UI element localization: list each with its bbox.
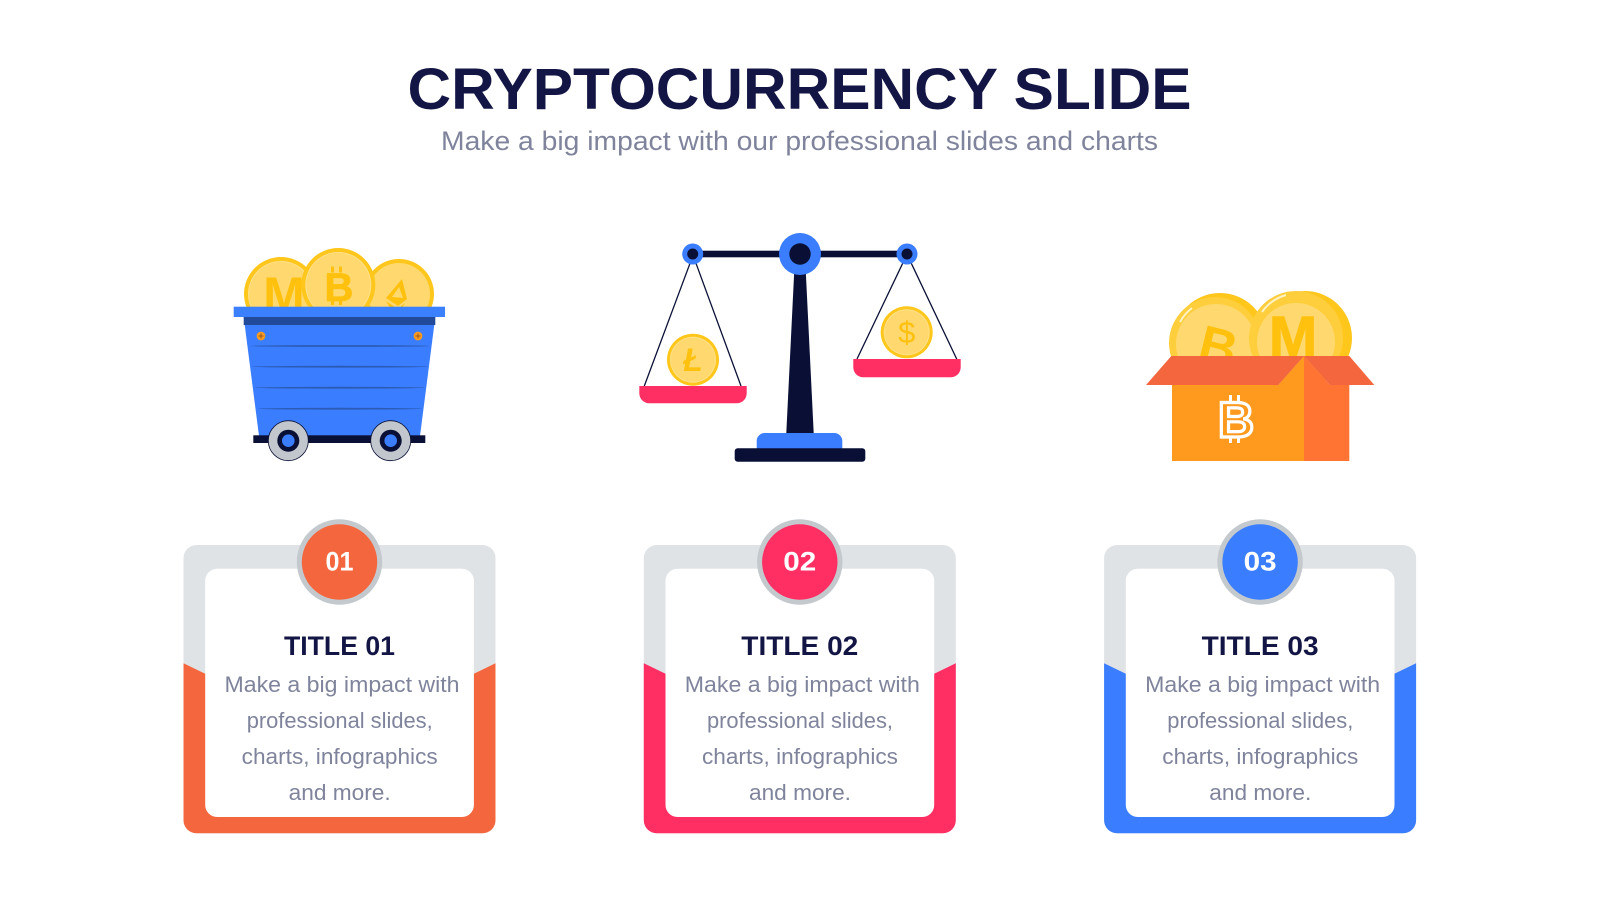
card title: TITLE 01 xyxy=(284,631,395,661)
box left flap xyxy=(1146,356,1304,385)
card inner xyxy=(1126,569,1394,817)
card text: and more. xyxy=(1209,780,1311,805)
scale strings xyxy=(644,263,957,386)
icon: balance scale xyxy=(639,233,961,462)
icon: bitcoin coin: B xyxy=(325,266,353,310)
card accent xyxy=(1104,663,1416,833)
title: CRYPTOCURRENCY SLIDE xyxy=(408,57,1192,122)
cart plank lines xyxy=(250,345,430,410)
scale beam xyxy=(693,251,907,257)
icon: monero coin xyxy=(244,257,318,331)
cart body xyxy=(244,317,435,436)
card frame xyxy=(1104,545,1416,833)
card inner xyxy=(666,569,934,817)
card text: and more. xyxy=(749,780,851,805)
icon: bitcoin coin in box: B xyxy=(1193,315,1243,380)
card frame xyxy=(184,545,496,833)
box side xyxy=(1304,356,1349,461)
scale left pan xyxy=(639,386,747,403)
card text: professional slides, xyxy=(707,708,893,733)
number badge: 03 xyxy=(1244,546,1277,576)
card text: professional slides, xyxy=(247,708,433,733)
icon: mining cart with coins xyxy=(234,248,445,461)
number badge xyxy=(1217,519,1303,605)
card accent xyxy=(644,663,956,833)
card title: TITLE 03 xyxy=(1202,631,1319,661)
card title: TITLE 02 xyxy=(741,631,858,661)
icon: bitcoin coin xyxy=(301,248,375,322)
icon: dollar coin xyxy=(881,306,933,358)
number badge: 01 xyxy=(326,546,354,576)
icon: monero coin in box: M xyxy=(1269,305,1317,370)
card text: Make a big impact with xyxy=(224,672,460,697)
cart rivets xyxy=(257,332,422,340)
card text: professional slides, xyxy=(1167,708,1353,733)
card text: charts, infographics xyxy=(702,744,898,769)
icon: bitcoin coin in box xyxy=(1169,293,1267,389)
card text: Make a big impact with xyxy=(1145,672,1380,697)
box right flap xyxy=(1304,356,1374,385)
card inner xyxy=(205,569,474,817)
scale pivot xyxy=(779,233,821,275)
icon: litecoin coin: Ł xyxy=(682,342,703,378)
icon: bitcoin symbol on box: B xyxy=(1218,392,1254,448)
cart rim xyxy=(234,307,445,317)
cart axle xyxy=(253,435,425,443)
number badge xyxy=(297,519,382,605)
scale base lower xyxy=(735,448,865,462)
cart wheel left xyxy=(268,421,308,461)
card frame xyxy=(644,545,956,833)
icon: monero coin: M xyxy=(263,267,305,323)
panel: card 02 xyxy=(644,519,956,833)
scale left joint xyxy=(682,244,703,264)
card text: and more. xyxy=(289,780,391,805)
panel: card 01 xyxy=(184,519,496,833)
card text xyxy=(1145,672,1380,805)
card text xyxy=(685,672,920,805)
icon: ethereum coin xyxy=(364,259,434,329)
number badge xyxy=(757,519,842,605)
scale right joint xyxy=(896,244,918,264)
number badge: 02 xyxy=(783,546,816,576)
icon: litecoin coin xyxy=(667,334,719,386)
card accent xyxy=(184,663,496,833)
panel: card 03 xyxy=(1104,519,1416,833)
scale post xyxy=(786,270,814,433)
card text: Make a big impact with xyxy=(685,672,920,697)
scale right pan xyxy=(853,359,961,377)
box front xyxy=(1172,356,1304,461)
card text: charts, infographics xyxy=(1162,744,1358,769)
icon: monero coin in box xyxy=(1249,291,1352,385)
cart wheel right xyxy=(371,421,411,461)
card text: charts, infographics xyxy=(242,744,438,769)
icon: box with coins xyxy=(1146,291,1374,461)
card text xyxy=(224,672,460,805)
subtitle: Make a big impact with our professional slides and charts xyxy=(441,126,1158,156)
scale base upper xyxy=(757,433,842,449)
icon: dollar coin: $ xyxy=(898,315,915,350)
cart inner band xyxy=(244,317,435,325)
